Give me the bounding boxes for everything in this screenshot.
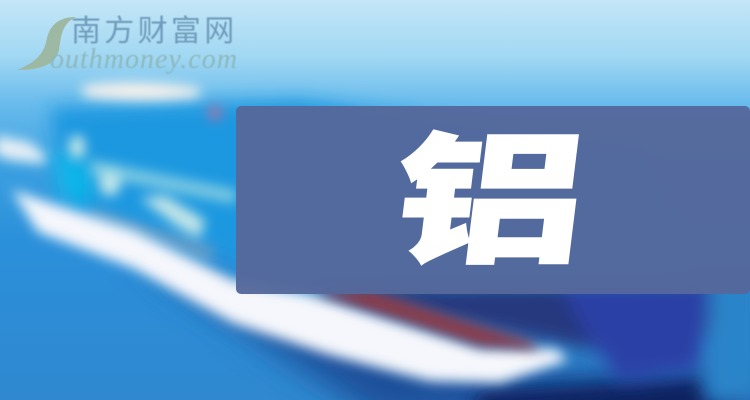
dark water under the hull [130,255,750,400]
red waterline stripe [312,290,540,350]
title character: 铝 [386,123,596,281]
title panel [236,106,750,294]
logo Chinese name: 南方财富网 [71,15,238,48]
white hull band [0,82,568,383]
logo domain: outhmoney.com [50,44,238,75]
ship superstructure [50,100,750,400]
ship deck highlights [69,106,236,262]
icon: logo swoosh [17,17,76,70]
logo: Southmoney [17,14,238,75]
